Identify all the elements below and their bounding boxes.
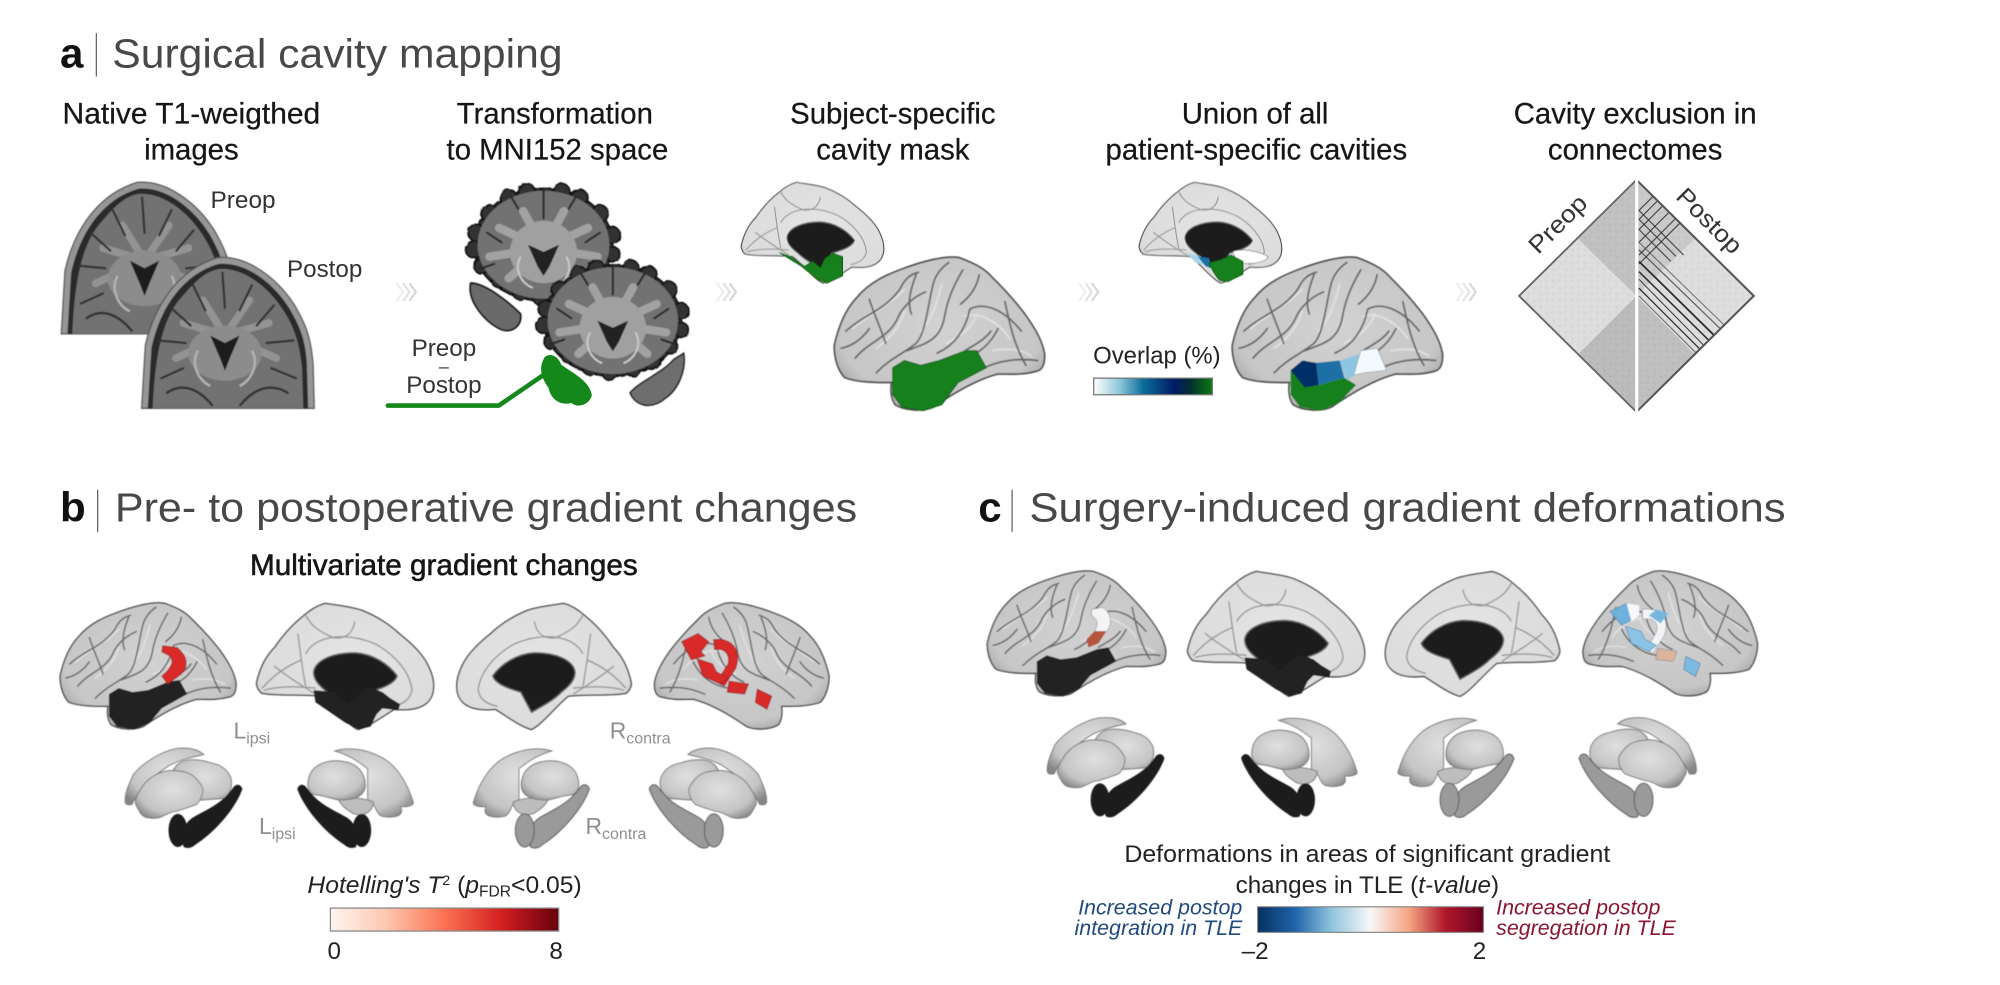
label R contra lower: R <box>585 813 602 839</box>
label preop rotated: Preop <box>1523 190 1593 259</box>
medial surface union <box>1139 182 1282 283</box>
subcortical 1 <box>125 748 242 848</box>
Hotelling legend <box>307 872 582 965</box>
brain c right lateral <box>1583 571 1758 696</box>
overlap legend: Overlap (%) <box>1093 342 1221 369</box>
legend left text: Increased postop <box>1078 895 1242 919</box>
lateral surface union with overlap <box>1232 257 1443 411</box>
T1-weighted head images <box>61 182 314 408</box>
heading: native T1: Native T1-weigthed <box>63 98 320 131</box>
connectome diamond matrix <box>1519 177 1754 415</box>
deformation legend heading: Deformations in areas of significant gradient <box>1124 841 1611 868</box>
diverging colour bar: 2 <box>1473 938 1486 965</box>
diverging colour bar: –2 <box>1242 938 1269 965</box>
brain c left medial <box>1187 571 1365 696</box>
arrow chevron 1 <box>397 283 416 301</box>
title c: Surgery-induced gradient deformations <box>1029 485 1786 531</box>
brain c right medial <box>1385 571 1560 696</box>
title b: b <box>60 484 86 531</box>
label L ipsi lower: ipsi <box>272 826 296 843</box>
subcortical c3 <box>1398 718 1514 817</box>
heading: transformation: Transformation <box>457 98 653 131</box>
panel c: deformations <box>978 484 1786 965</box>
lateral surface with green cavity <box>834 257 1045 411</box>
title b: Pre- to postoperative gradient changes <box>115 485 857 531</box>
legend left text: integration in TLE <box>1075 916 1243 940</box>
label preop minus postop: Preop <box>412 335 476 362</box>
heading: transformation: to MNI152 space <box>447 133 668 166</box>
heading: union: patient-specific cavities <box>1106 133 1407 166</box>
arrow chevron 4 <box>1457 283 1476 301</box>
brain c left lateral <box>987 571 1166 696</box>
subcortical 3 <box>473 749 589 848</box>
label preop minus postop: Postop <box>406 372 482 399</box>
label R contra lower: contra <box>602 826 647 843</box>
Hotelling legend: FDR <box>479 884 511 901</box>
heading: subject-specific: Subject-specific <box>790 98 996 131</box>
subcortical c4 <box>1579 718 1696 817</box>
panel b: gradient changes <box>60 484 857 965</box>
label postop: Postop <box>287 256 362 283</box>
label R contra upper: R <box>610 717 626 743</box>
subcortical 4 <box>649 748 767 848</box>
MNI152 brain slices <box>466 184 689 405</box>
legend right text: segregation in TLE <box>1496 916 1677 940</box>
brain right medial <box>457 603 631 730</box>
title a: Surgical cavity mapping <box>112 31 563 77</box>
arrow chevron 3 <box>1079 283 1098 301</box>
label R contra upper: contra <box>626 731 671 748</box>
heading: cavity exclusion: connectomes <box>1548 133 1722 166</box>
Hotelling legend: 2 <box>442 872 450 888</box>
heading: cavity exclusion: Cavity exclusion in <box>1514 98 1757 131</box>
subcortical c2 <box>1241 718 1357 817</box>
label L ipsi lower: L <box>259 813 272 839</box>
label preop minus postop: – <box>439 356 449 376</box>
label L ipsi upper: ipsi <box>246 731 270 748</box>
green cavity difference with leader line <box>388 355 592 406</box>
medial surface with green cavity <box>741 182 884 283</box>
Hotelling legend: 8 <box>549 938 563 965</box>
title c: c <box>978 484 1002 531</box>
panel a: surgical cavity mapping <box>60 30 1757 415</box>
Hotelling legend: ( <box>450 872 465 899</box>
heading: subject-specific: cavity mask <box>816 133 970 166</box>
brain right lateral with red <box>654 603 829 729</box>
brain left lateral with red <box>60 603 236 730</box>
legend right text: Increased postop <box>1496 895 1660 919</box>
heading: native T1: images <box>144 133 239 166</box>
label postop rotated: Postop <box>1670 183 1747 260</box>
Hotelling legend: Hotelling's T <box>307 872 445 899</box>
deformation legend heading: changes in TLE (t-value) <box>1236 872 1499 899</box>
arrow chevron 2 <box>717 283 736 301</box>
heading multivariate: Multivariate gradient changes <box>250 549 638 582</box>
subcortical c1 <box>1047 718 1165 817</box>
label L ipsi upper: L <box>233 717 246 743</box>
Hotelling legend: p <box>464 872 479 899</box>
overlap legend <box>1093 342 1221 395</box>
title a: a <box>60 30 84 77</box>
label preop: Preop <box>211 187 276 214</box>
brain left medial <box>256 603 434 730</box>
heading: union: Union of all <box>1182 98 1328 131</box>
Hotelling legend: 0 <box>327 938 341 965</box>
subcortical 2 <box>297 749 413 848</box>
diverging colour bar <box>1242 907 1486 965</box>
Hotelling legend: <0.05) <box>511 872 582 899</box>
